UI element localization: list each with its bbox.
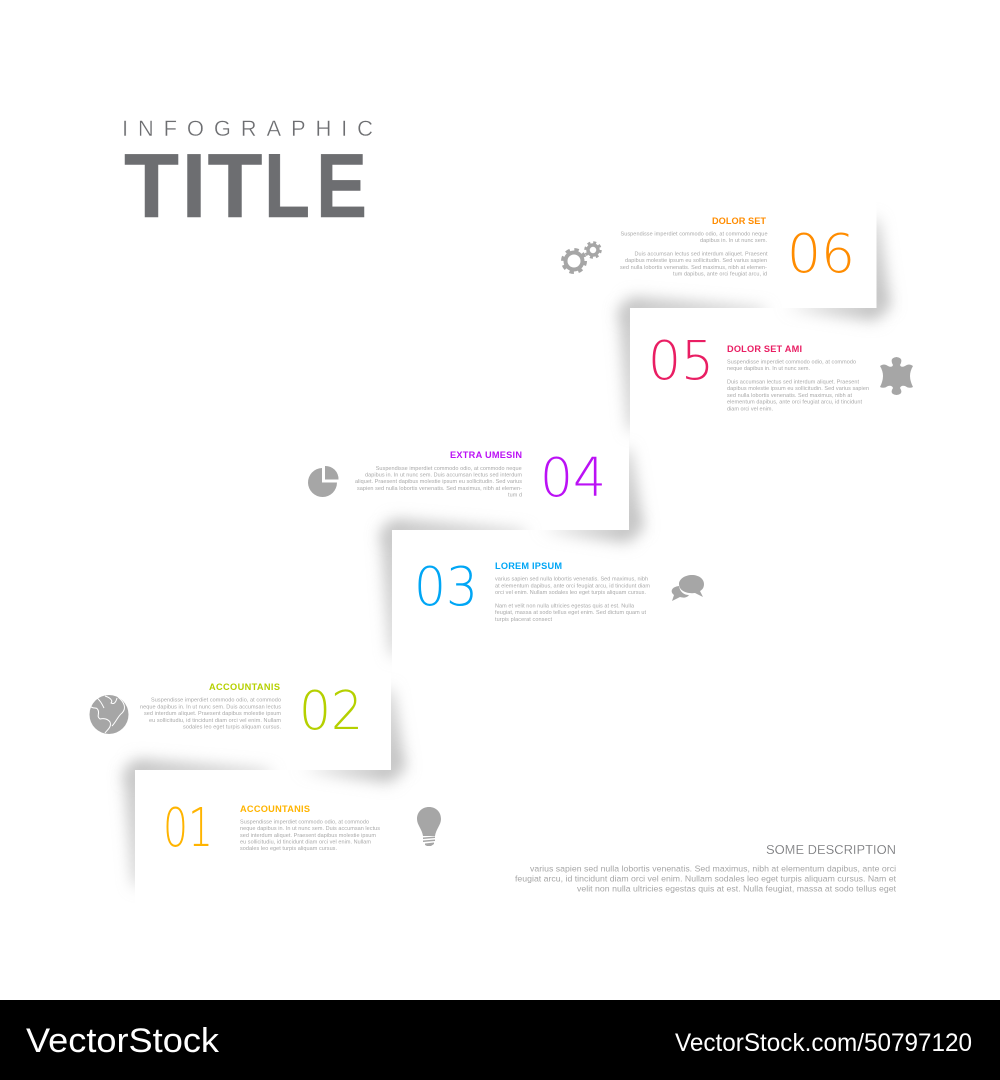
panel: step 02 [90, 679, 363, 742]
step 01 text: eu sollicitudiu, id tincidunt diam orci vel enim. Nullam [240, 840, 371, 846]
step 04 heading: EXTRA UMESIN [450, 450, 522, 460]
step 01 text: sed interdum aliquet. Praesent dapibus molestie ipsum [240, 833, 376, 839]
step 01 text [240, 820, 380, 852]
step 03 heading: LOREM IPSUM [495, 561, 562, 571]
step 01 number: 01 [163, 796, 213, 859]
step 05 text: Suspendisse imperdiet commodo odio, at commodo [727, 360, 856, 366]
step 06 heading: DOLOR SET [712, 216, 766, 226]
icon: speech bubbles [672, 575, 704, 601]
title: main: T [208, 136, 262, 237]
step 01 text: sodales leo eget turpis aliquam cursus. [240, 846, 337, 852]
panel: step 06 [562, 216, 855, 285]
description [515, 843, 897, 894]
step 05 number: 05 [648, 329, 714, 392]
icon: globe [90, 695, 128, 734]
step 06 text: Suspendisse imperdiet commodo odio, at commodo neque [620, 232, 768, 238]
step 03 text [495, 577, 650, 623]
step 05 text: Duis accumsan lectus sed interdum aliquet. Praesent [727, 380, 859, 386]
step 06 number: 06 [787, 222, 855, 285]
icon: gears [562, 242, 600, 272]
step 04 text: dapibus in. In ut nunc sem. Duis accumsan lectus sed interdum [365, 472, 522, 478]
step 04 text: Suspendisse imperdiet commodo odio, at commodo neque [376, 466, 522, 472]
step 05 text: dapibus molestie ipsum eu sollicitudin. Sed varius sapien [727, 386, 869, 392]
description text: velit non nulla ultricies egestas quis at est. Nulla feugiat, massa at sodo tellus eget [577, 884, 897, 894]
step 01 heading: ACCOUNTANIS [240, 804, 310, 814]
step 02 text: Suspendisse imperdiet commodo odio, at commodo [151, 698, 281, 704]
title: main: L [264, 136, 310, 237]
step 05 text: neque dapibus in. In ut nunc sem. [727, 366, 810, 372]
step 02 heading: ACCOUNTANIS [209, 682, 280, 692]
step 06 text: dapibus in. In ut nunc sem. [700, 238, 767, 244]
step 03 text: varius sapien sed nulla lobortis venenatis. Sed maximus, nibh [495, 577, 648, 583]
step 03 text: at elementum dapibus, ante orci feugiat arcu, id tincidunt diam [495, 584, 650, 590]
step 02 number: 02 [299, 679, 363, 742]
step 03 text: Nam et velit non nulla ultricies egestas quis at est. Nulla [495, 604, 635, 610]
step 05 text [727, 360, 869, 412]
title: main: E [316, 136, 367, 237]
step 05 text: sed nulla lobortis venenatis. Sed maximus, nibh at [727, 393, 852, 399]
step 02 text [140, 698, 281, 730]
step 06 text: sed nulla lobortis venenatis. Sed maximus, nibh at elemen- [620, 265, 767, 271]
panel: step 05 [648, 329, 913, 412]
footer bar [0, 1000, 1000, 1080]
step 05 text: elementum dapibus, ante orci feugiat arcu, id tincidunt [727, 400, 862, 406]
step 05 heading: DOLOR SET AMI [727, 344, 802, 354]
description heading: SOME DESCRIPTION [766, 843, 896, 857]
title: infographic: INFOGRAPHIC [122, 116, 373, 141]
panel: step 04 [308, 446, 606, 509]
footer logo: VectorStock [26, 1022, 220, 1060]
step 04 text [355, 466, 522, 498]
step 01 text: Suspendisse imperdiet commodo odio, at commodo [240, 820, 369, 826]
step 03 text: feugiat, massa at sodo tellus eget enim. Sed dictum quam ut [495, 610, 646, 616]
step 02 text: neque dapibus in. In ut nunc sem. Duis accumsan lectus [140, 704, 281, 710]
step 03 number: 03 [414, 555, 478, 618]
step 04 text: sapien sed nulla lobortis venenatis. Sed maximus, nibh at elemen- [357, 486, 522, 492]
footer url: VectorStock.com/50797120 [675, 1029, 972, 1057]
step 02 text: sodales leo eget turpis aliquam cursus. [183, 724, 281, 730]
title block [122, 116, 373, 237]
panel shadows: steps 01 and 02 [125, 690, 405, 885]
step 06 text: tum dapibus, ante orci feugiat arcu, id [673, 272, 767, 278]
title: main: I [182, 136, 206, 237]
panel: step 03 [414, 555, 704, 623]
title: main: T [124, 136, 179, 237]
icon: puzzle piece [880, 357, 913, 395]
step 05 text: diam orci vel enim. [727, 406, 773, 412]
step 04 text: tum d [508, 492, 522, 498]
icon: light bulb [417, 807, 441, 846]
panel: step 01 [163, 796, 441, 859]
step 06 text: Duis accumsan lectus sed interdum aliquet. Praesent [634, 252, 768, 258]
step 04 text: aliquet. Praesent dapibus molestie ipsum eu sollicitudin. Sed varius [355, 479, 522, 485]
step 06 text [620, 232, 768, 278]
step 03 text: turpis placerat consect [495, 617, 552, 623]
step 01 text: neque dapibus in. In ut nunc sem. Duis accumsan lectus [240, 826, 380, 832]
step 02 text: eu sollicitudiu, id tincidunt diam orci vel enim. Nullam [149, 718, 281, 724]
icon: pie chart [308, 466, 339, 497]
step 06 text: dapibus molestie ipsum eu sollicitudin. Sed varius sapien [625, 258, 767, 264]
description text: feugiat arcu, id tincidunt diam orci vel enim. Nullam sodales leo eget turpis aliquam cursus. Nam et [515, 874, 897, 884]
step 04 number: 04 [540, 446, 606, 509]
step 02 text: sed interdum aliquet. Praesent dapibus molestie ipsum [144, 711, 281, 717]
description text: varius sapien sed nulla lobortis venenatis. Sed maximus, nibh at elementum dapibus, ante orci [530, 864, 896, 874]
panel shadows: steps 03 and 04 [382, 450, 643, 655]
panel shadows: steps 05 and 06 [620, 220, 890, 430]
description text [515, 864, 897, 894]
step 03 text: orci vel enim. Nullam sodales leo eget turpis aliquam cursus. [495, 590, 646, 596]
